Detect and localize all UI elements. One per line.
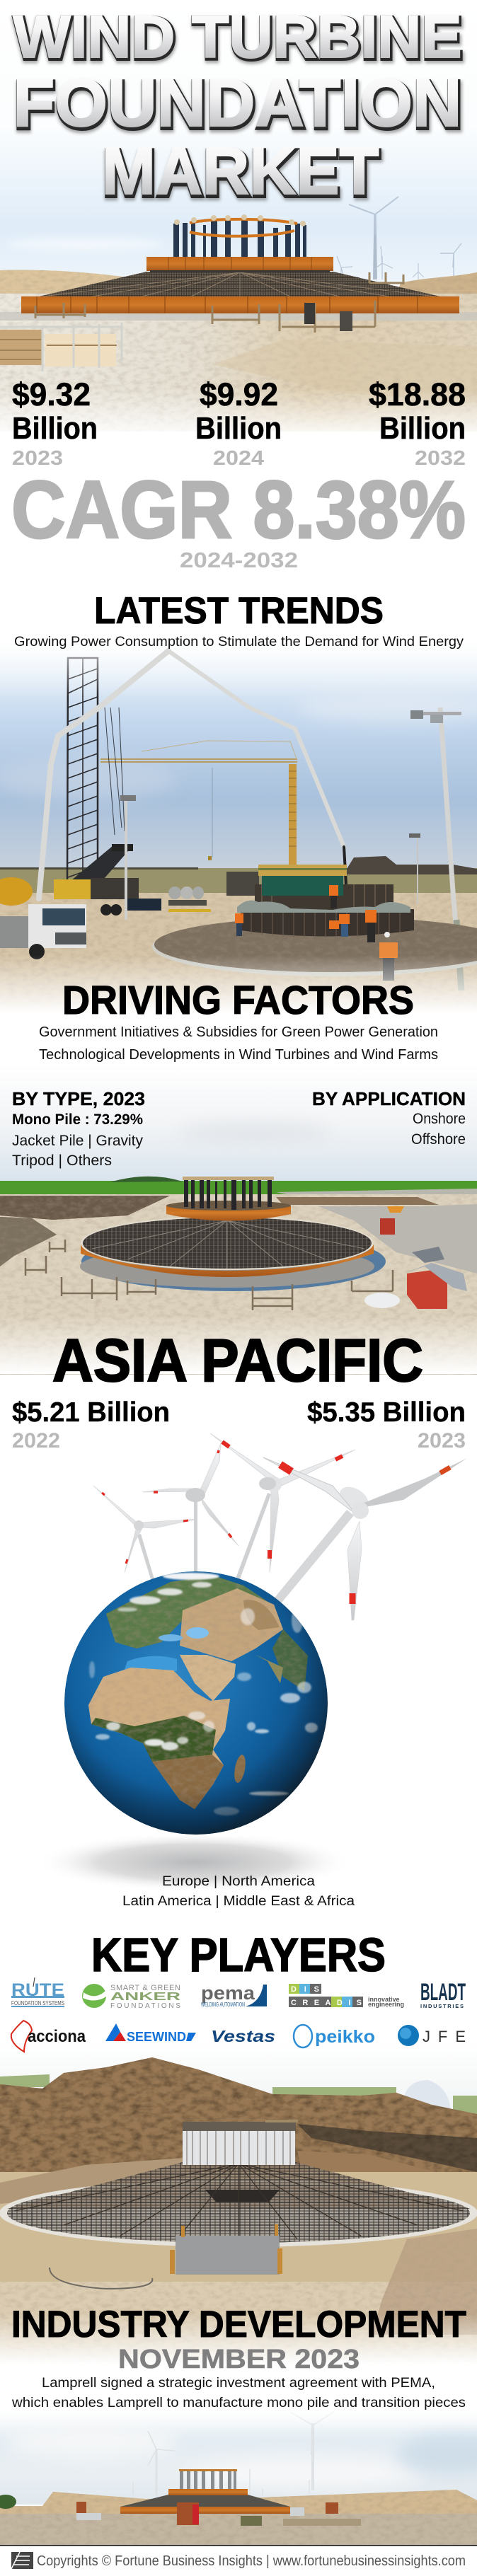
date: november 2023: NOVEMBER 2023 <box>118 2345 360 2374</box>
logo: RUTE <box>11 1977 64 2007</box>
panel: hero construction photo <box>0 0 477 446</box>
key player logos <box>11 1977 466 2052</box>
CAGR period: 2024-2032 <box>180 548 298 572</box>
panel: rebar foundation photo <box>0 2041 477 2364</box>
segment: by application: Offshore <box>411 1131 466 1148</box>
logo: Peikko: peikko <box>315 2027 375 2047</box>
stat: asia pacific 2022: 2022 <box>12 1429 60 1452</box>
icon: turbine 3 <box>210 1433 355 1579</box>
logo: Vestas: Vestas <box>211 2027 275 2045</box>
segment: by application: Onshore <box>413 1111 466 1127</box>
stat: 2024: Billion <box>195 411 282 446</box>
stat: 2032: $18.88 <box>369 376 466 412</box>
other regions <box>122 1874 355 1909</box>
logo: Pema <box>201 1982 267 2008</box>
segment: by type: BY TYPE, 2023 <box>12 1088 145 1109</box>
stat: asia pacific 2023: 2023 <box>418 1429 466 1452</box>
tower crane <box>100 741 297 867</box>
title <box>13 4 464 212</box>
background turbines <box>133 2411 335 2495</box>
stat: 2032: 2032 <box>415 447 466 470</box>
title line: FOUNDATION: FOUNDATION <box>14 69 464 145</box>
logo: Pema: pema <box>201 1982 255 2004</box>
icon: wind turbine background <box>337 197 461 282</box>
icon: Fortune Business Insights logo <box>11 2552 33 2569</box>
globe shadow <box>35 1832 354 1892</box>
logo: Dis Creadis: engineering <box>368 2001 404 2008</box>
icon: turbine 1 <box>93 1486 197 1579</box>
logo: Dis Creadis: DIS <box>291 1985 319 1994</box>
market size figures <box>12 376 466 470</box>
site machines <box>76 2502 361 2526</box>
vehicles <box>0 877 211 959</box>
stat: 2023 <box>12 376 98 470</box>
development description: Lamprell signed a strategic investment agreement with PEMA, <box>42 2375 435 2391</box>
title line: WIND TURBINE: WIND TURBINE <box>14 7 464 74</box>
wooden pallets <box>25 1240 393 1310</box>
logo: JFE: JFE <box>423 2028 466 2045</box>
site equipment <box>364 1206 467 1309</box>
heading: key players: KEY PLAYERS <box>91 1929 386 1982</box>
panel: bottom construction photo <box>0 2405 477 2546</box>
title line: WIND TURBINE: WIND TURBINE <box>14 5 463 71</box>
circular foundation under construction <box>152 865 477 976</box>
latest trend text: Growing Power Consumption to Stimulate the Demand for Wind Energy <box>14 635 464 649</box>
driving factors text: Government Initiatives & Subsidies for Green Power Generation <box>39 1024 438 1040</box>
workers <box>235 885 398 981</box>
logo: Anker: SMART & GREEN <box>110 1984 180 1992</box>
title line: WIND TURBINE: WIND TURBINE <box>13 4 461 70</box>
panel: concrete pouring photo <box>0 640 477 1013</box>
segment: by type: Mono Pile : 73.29% <box>12 1111 143 1128</box>
small foundation <box>120 2469 290 2514</box>
stat: asia pacific 2022 <box>12 1397 170 1452</box>
lamp posts <box>120 707 461 990</box>
segment: by type <box>12 1088 145 1169</box>
stat: 2024 <box>195 376 282 470</box>
title line: FOUNDATION: FOUNDATION <box>14 67 463 143</box>
title line: MARKET: MARKET <box>103 138 381 212</box>
stat: 2023: 2023 <box>12 447 63 470</box>
logo: RUTE: RUTE <box>11 1980 64 2000</box>
stat: 2024: $9.92 <box>200 376 278 412</box>
logo: Acciona: acciona <box>28 2027 86 2046</box>
stat: 2032 <box>369 376 466 470</box>
logo: Dis Creadis <box>289 1984 404 2008</box>
heading: latest trends: LATEST TRENDS <box>94 590 384 632</box>
driving factors text: Technological Developments in Wind Turbines and Wind Farms <box>39 1047 438 1063</box>
logo: Anker: FOUNDATIONS <box>110 2002 180 2010</box>
lattice crawler crane <box>54 658 139 899</box>
other regions: Europe | North America <box>162 1874 315 1889</box>
stat: asia pacific 2023: $5.35 Billion <box>307 1397 466 1428</box>
title line: FOUNDATION: FOUNDATION <box>13 65 462 141</box>
logo: Bladt: INDUSTRIES <box>420 2003 464 2009</box>
logo: Seewind <box>105 2023 196 2044</box>
logo: Anker: ANKER <box>110 1991 181 2003</box>
segment: by type: Jacket Pile | Gravity <box>12 1133 143 1149</box>
stat: 2023: $9.32 <box>12 376 91 412</box>
panel: foundation aerial photo <box>0 1065 477 1375</box>
heading: driving factors: DRIVING FACTORS <box>62 978 414 1023</box>
development description <box>11 2375 466 2410</box>
other regions: Latin America | Middle East & Africa <box>122 1894 355 1909</box>
development description: which enables Lamprell to manufacture mono pile and transition pieces <box>11 2395 466 2410</box>
concrete pump boom <box>39 651 347 899</box>
segment: by application <box>312 1088 466 1148</box>
logo: Dis Creadis: CREADIS <box>291 1999 362 2007</box>
logo: RUTE: FOUNDATION SYSTEMS <box>11 1999 64 2006</box>
segment: by type: Tripod | Others <box>12 1153 112 1169</box>
icon: earth globe <box>64 1571 328 1835</box>
logo: Anker <box>82 1984 181 2010</box>
logo: Seewind: SEEWIND <box>127 2030 186 2044</box>
icon: globe with wind turbines <box>64 1433 467 1835</box>
logo: Pema: WELDING AUTOMATION <box>201 2002 245 2008</box>
stat: 2032: Billion <box>379 411 466 446</box>
footer <box>0 2545 477 2576</box>
stat: 2024: 2024 <box>213 447 264 470</box>
segment: by application: BY APPLICATION <box>312 1088 466 1109</box>
icon: turbine 2 <box>142 1443 238 1572</box>
logo: Peikko <box>294 2025 375 2047</box>
rebar foundation disc <box>0 2120 477 2275</box>
logo: Dis Creadis: innovative <box>368 1996 400 2003</box>
stat: asia pacific 2022: $5.21 Billion <box>12 1397 170 1428</box>
logo: JFE <box>398 2025 466 2046</box>
stat: asia pacific 2023 <box>307 1397 466 1452</box>
logo: Acciona <box>11 2021 86 2052</box>
driving factors text <box>39 1024 438 1063</box>
stat: 2023: Billion <box>12 411 98 446</box>
title line: MARKET: MARKET <box>103 136 380 210</box>
title line: MARKET: MARKET <box>102 134 379 208</box>
foundation with orange formwork <box>21 214 459 313</box>
heading: asia pacific: ASIA PACIFIC <box>52 1327 423 1394</box>
icon: turbine 4 <box>263 1457 467 1620</box>
wooden pallets and stacks <box>35 272 403 333</box>
